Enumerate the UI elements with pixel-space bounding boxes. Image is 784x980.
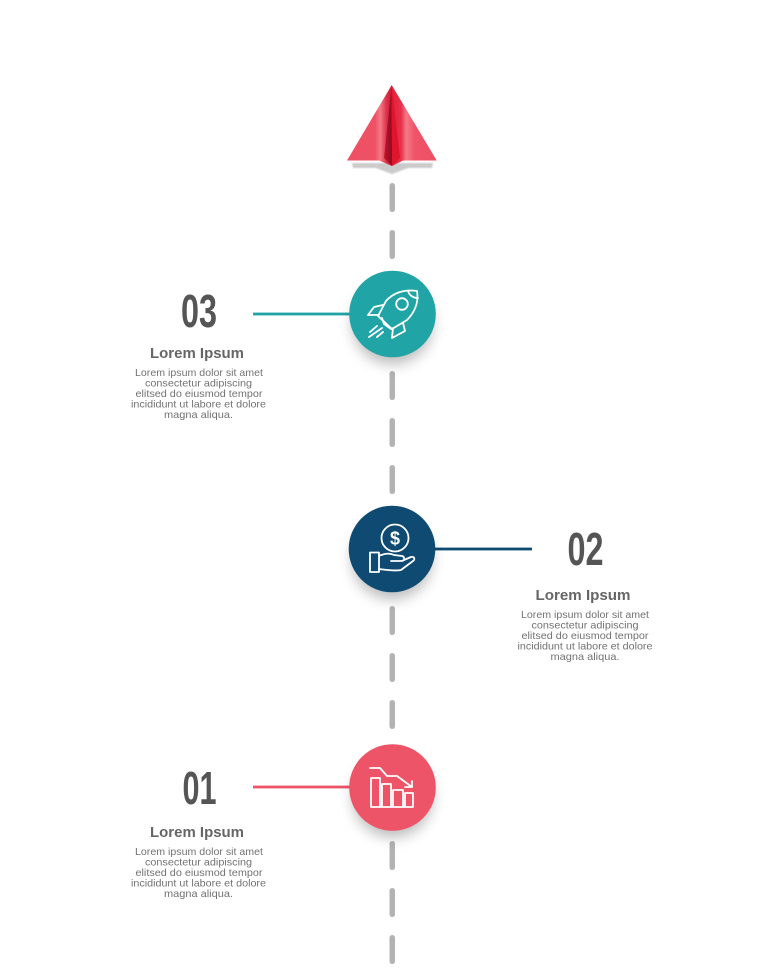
body text: consectetur adipiscing	[532, 620, 639, 632]
number 01: 01	[182, 762, 216, 814]
step 01 circle	[349, 744, 436, 837]
body text	[131, 368, 266, 421]
body text: consectetur adipiscing	[145, 378, 252, 390]
body text	[518, 610, 653, 663]
step 01 text	[131, 762, 266, 900]
body text: incididunt ut labore et dolore	[518, 642, 653, 652]
body text: elitsed do eiusmod tempor	[136, 868, 263, 879]
body text: incididunt ut labore et dolore	[131, 400, 266, 410]
step 02 text	[518, 523, 653, 663]
step 02 circle	[349, 506, 435, 599]
body text: magna aliqua.	[164, 410, 233, 421]
body text: Lorem ipsum dolor sit amet	[135, 368, 263, 379]
body text: magna aliqua.	[164, 889, 233, 900]
step 01 connector line	[253, 786, 351, 788]
body text: consectetur adipiscing	[145, 858, 252, 868]
icon: red paper plane	[347, 85, 437, 174]
step 03 connector line	[253, 313, 351, 315]
number 02: 02	[568, 523, 604, 575]
body text: incididunt ut labore et dolore	[131, 878, 266, 890]
body text: magna aliqua.	[550, 652, 620, 663]
step 03 circle	[349, 271, 436, 364]
step 03 text	[131, 285, 266, 421]
number 03: 03	[181, 285, 217, 337]
body text: elitsed do eiusmod tempor	[136, 389, 263, 400]
heading: Lorem Ipsum	[150, 825, 244, 841]
heading: Lorem Ipsum	[536, 588, 630, 604]
body text: Lorem ipsum dolor sit amet	[521, 610, 649, 621]
body text: Lorem ipsum dolor sit amet	[135, 847, 263, 858]
dashed timeline	[390, 183, 395, 964]
body text: elitsed do eiusmod tempor	[522, 631, 649, 642]
body text	[131, 847, 266, 900]
step 02 connector line	[434, 548, 532, 550]
icon: coin in hand: $	[390, 528, 400, 548]
icon: declining bar chart	[370, 768, 413, 807]
heading: Lorem Ipsum	[150, 346, 244, 362]
icon: rocket	[368, 290, 418, 338]
